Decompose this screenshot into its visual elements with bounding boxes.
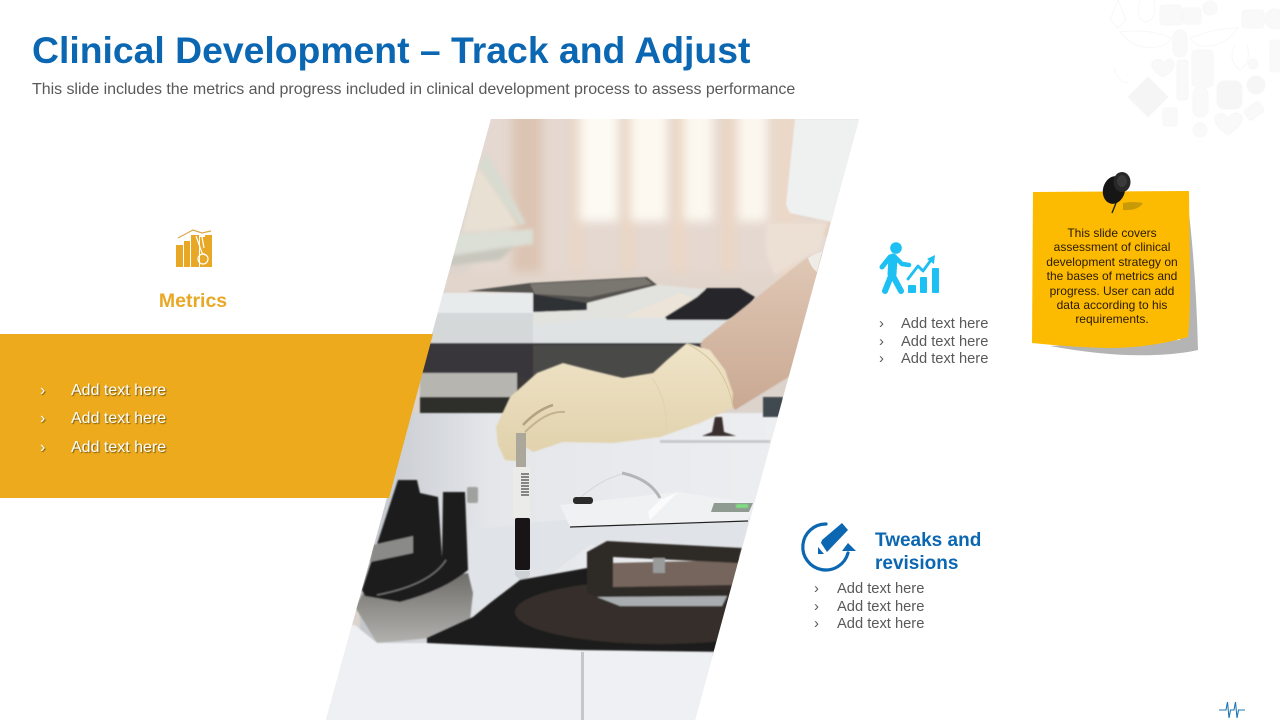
paper and wires	[560, 499, 749, 526]
silver ring and black device	[355, 480, 478, 643]
list: metrics items: Add text here	[71, 439, 166, 456]
bottom white panels	[320, 625, 730, 720]
subtitle: This slide includes the metrics and progress included in clinical development process to assess performance	[32, 81, 795, 98]
monitor	[446, 153, 533, 266]
bench surface	[360, 413, 800, 653]
heading: metrics: Metrics	[159, 290, 227, 312]
note text: progress. User can add	[1050, 284, 1174, 298]
list: progress items	[879, 316, 988, 367]
list: progress items: ›	[879, 351, 884, 367]
note text	[1046, 226, 1178, 326]
list: tweaks items: Add text here	[837, 616, 924, 632]
tube	[516, 433, 526, 467]
icon: person climbing bar chart	[880, 242, 939, 294]
list: tweaks items: Add text here	[837, 581, 924, 597]
arm	[700, 222, 840, 410]
curtain	[444, 119, 831, 290]
heading: tweaks and revisions: Tweaks and	[875, 530, 981, 551]
list: progress items: Add text here	[901, 334, 988, 350]
heading: tweaks and revisions	[875, 530, 981, 574]
list: metrics items: Add text here	[71, 410, 166, 427]
heading: tweaks and revisions: revisions	[875, 553, 958, 574]
list: progress items: ›	[879, 334, 884, 350]
list: metrics items: ›	[40, 410, 45, 427]
glove	[496, 343, 733, 462]
note shadow and paper	[1032, 172, 1198, 356]
icon: metrics chart with stethoscope	[176, 229, 212, 267]
icon: pencil with circular arrow	[801, 522, 856, 572]
note text: the bases of metrics and	[1047, 269, 1177, 283]
turntable	[426, 540, 742, 656]
list: metrics items: ›	[40, 382, 45, 399]
panel: metrics band	[0, 334, 433, 498]
list: tweaks items: Add text here	[837, 599, 924, 615]
list: progress items: ›	[879, 316, 884, 332]
title: Clinical Development – Track and Adjust	[32, 29, 750, 71]
note text: This slide covers	[1067, 226, 1157, 240]
photo: gloved hand holding blood sample tube	[326, 119, 859, 720]
list: progress items: Add text here	[901, 351, 988, 367]
note text: assessment of clinical	[1054, 240, 1170, 254]
list: metrics items: Add text here	[71, 382, 166, 399]
list: tweaks items	[814, 581, 924, 632]
watermark: medical icons	[1129, 76, 1264, 134]
desk and keyboard	[420, 277, 755, 415]
list: tweaks items: ›	[814, 599, 819, 615]
list: metrics items	[40, 382, 167, 456]
note text: development strategy on	[1046, 255, 1178, 269]
sticky note	[1032, 172, 1198, 356]
list: progress items: Add text here	[901, 316, 988, 332]
note text: data according to his	[1057, 298, 1167, 312]
note text: requirements.	[1075, 312, 1149, 326]
list: tweaks items: ›	[814, 581, 819, 597]
icon: heartbeat logo	[1219, 702, 1245, 718]
list: tweaks items: ›	[814, 616, 819, 632]
list: metrics items: ›	[40, 439, 45, 456]
